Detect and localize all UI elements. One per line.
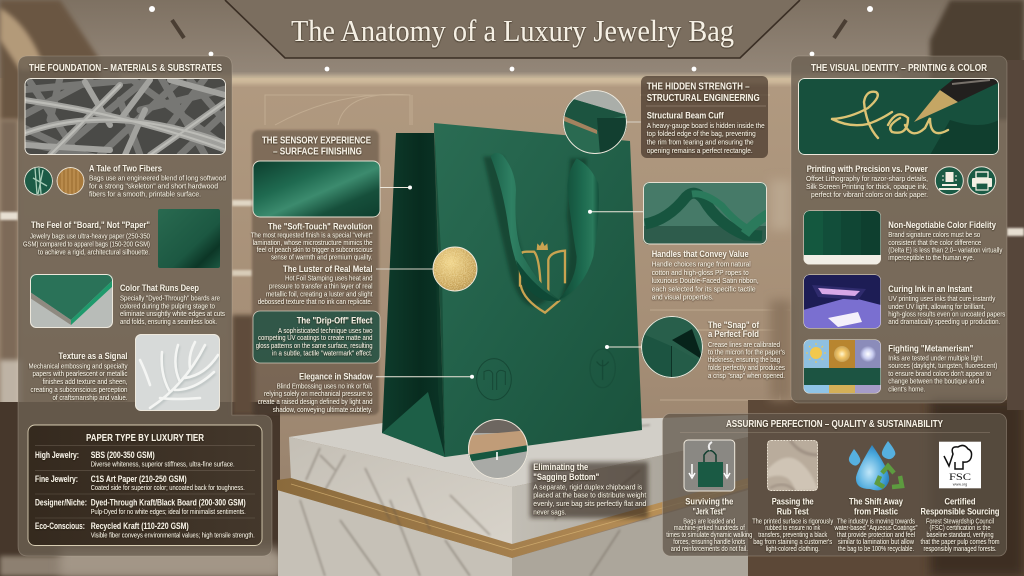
image: soft-touch satin surface <box>253 161 380 217</box>
assuring perfection heading: ASSURING PERFECTION – QUALITY & SUSTAINABILITY <box>726 419 943 430</box>
hidden strength background <box>641 76 768 158</box>
text: texture as a signal: creating a subconscious perception <box>30 385 128 394</box>
text: surviving the jerk test: "Jerk Test" <box>693 506 726 518</box>
text: passing the rub test: Passing the <box>772 496 814 508</box>
text: surviving the jerk test <box>666 496 752 553</box>
text: handles that convey value: luxurious Double-Faced Satin ribbon, <box>652 276 759 285</box>
text: soft-touch revolution: feel of peach skin to trigger a subconscious <box>257 245 373 254</box>
text: surviving the jerk test: forces, ensuring handle knots <box>673 537 746 546</box>
panel: the foundation <box>18 56 272 556</box>
text: eliminating the sagging bottom: A separate, rigid duplex chipboard is <box>533 482 643 492</box>
text: snap of a perfect fold: The "Snap" of <box>708 320 760 331</box>
arrow: cuff leader <box>627 121 641 123</box>
text: color fidelity: (Delta E) is less than 2.0– variation virtually <box>888 246 1003 254</box>
text: eliminating the sagging bottom: evenly, sure bag sits perfectly flat and <box>533 499 646 508</box>
ribbon shadow <box>483 157 587 306</box>
text: certified responsible sourcing: (FSC) certification is the <box>930 523 991 532</box>
panel: assuring perfection <box>662 414 1006 556</box>
drip-off text: A sophisticated technique uses two <box>278 326 372 335</box>
text: a tale of two fibers: fibers for a smooth, printable surface. <box>89 190 201 198</box>
table: paper type by luxury tier <box>28 425 262 546</box>
table rows: SBS (200-350 GSM) <box>91 450 155 461</box>
image: color swatches <box>803 210 881 265</box>
text: handles that convey value: Handles that Convey Value <box>652 249 749 260</box>
icon: gold foil circle <box>433 247 477 291</box>
text: structural beam cuff: top folded edge of the bag, preventing <box>647 129 756 138</box>
icon: FSC logo: FSC <box>949 472 971 482</box>
text: feel of board <box>23 220 150 256</box>
bag gusset <box>382 133 445 457</box>
image: satin ribbon <box>643 182 768 246</box>
image: green paper swatch <box>158 209 220 268</box>
text: shift away from plastic <box>834 496 918 553</box>
text: passing the rub test: The printed surface is rigorously <box>752 516 834 526</box>
sagging text shadow <box>530 462 648 518</box>
table rows: Dyed-Through Kraft/Black Board (200-300 GSM) <box>91 498 246 508</box>
text: fighting metamerism: to ensure brand colors don't appear to <box>888 369 991 378</box>
text: fighting metamerism: Inks are tested under multiple light <box>888 354 982 362</box>
text: structural beam cuff: A heavy-gauge board is hidden inside the <box>647 121 765 130</box>
text: curing ink: and dramatically speeding up production. <box>888 317 1000 326</box>
text: certified responsible sourcing: that the paper pulp comes from <box>920 537 1000 546</box>
icon: FSC logo <box>939 442 981 488</box>
image: dyed-through board <box>30 274 113 328</box>
text: luster of real metal: pressure to transfer a thin layer of real <box>269 282 373 290</box>
drip-off text: gloss patterns on the same surface, resulting <box>256 341 372 350</box>
text: printing with precision: perfect for vibrant colors on dark paper. <box>811 190 928 199</box>
table rows: High Jewelry: <box>35 450 79 461</box>
text: curing ink: UV printing uses inks that cure instantly <box>888 294 996 303</box>
arrow: snap leader <box>605 345 641 349</box>
text: curing ink <box>888 284 1006 326</box>
text: feel of board: GSM) compared to apparel bags (150-200 GSM) <box>23 240 150 248</box>
gold foil logo <box>520 241 565 313</box>
text: eliminating the sagging bottom: placed at the base to distribute weight <box>533 490 646 500</box>
text: color fidelity: consistent that the color difference <box>888 238 981 247</box>
icon: hardwood fiber <box>56 167 84 195</box>
text: soft-touch revolution <box>251 222 373 262</box>
text: shift away from plastic: water-based "Aqueous Coatings" <box>834 523 918 532</box>
icon: softwood fiber <box>24 166 53 196</box>
text: shift away from plastic: The industry is moving towards <box>837 516 915 526</box>
text: a tale of two fibers: A Tale of Two Fibers <box>89 164 162 174</box>
text: elegance in shadow: Blind Embossing uses no ink or foil, <box>277 382 372 390</box>
text: curing ink: high-gloss results even on uncoated papers <box>888 310 1006 318</box>
drip-off text: The "Drip-Off" Effect <box>297 316 373 326</box>
text: texture as a signal: finishes add texture and sheen, <box>42 377 128 386</box>
arrow: soft-touch leader <box>380 186 412 190</box>
text: passing the rub test: Rub Test <box>777 506 809 518</box>
table heading: PAPER TYPE BY LUXURY TIER <box>86 433 205 444</box>
text: printing with precision: Silk Screen Printing for thick, opaque ink, <box>806 182 928 191</box>
text: snap of a perfect fold: folds perfectly and produces <box>708 363 785 372</box>
text: fighting metamerism <box>888 344 997 394</box>
text: soft-touch revolution: The "Soft-Touch" Revolution <box>268 222 373 232</box>
text: eliminating the sagging bottom: Eliminating the <box>533 462 588 473</box>
text: surviving the jerk test: Surviving the <box>685 496 733 508</box>
text: surviving the jerk test: Bags are loaded and <box>683 516 735 526</box>
text: snap of a perfect fold <box>708 320 785 380</box>
sensory panel background <box>252 130 379 415</box>
text: color that runs deep: Color That Runs Deep <box>120 283 199 294</box>
text: a tale of two fibers <box>89 164 226 198</box>
text: eliminating the sagging bottom: never sags. <box>533 508 566 516</box>
text: texture as a signal <box>28 351 128 402</box>
text: color fidelity: imperceptible to the human eye. <box>888 253 974 262</box>
text: printing with precision: Printing with Precision vs. Power <box>807 164 928 175</box>
table rows: Eco-Conscious: <box>35 521 85 532</box>
green bag <box>382 123 642 457</box>
text: handles that convey value: cotton and high-gloss PP ropes to <box>652 268 749 277</box>
text: handles that convey value: Handle choices range from natural <box>652 260 751 268</box>
text: color fidelity <box>888 220 1003 262</box>
panel: the sensory experience <box>251 130 477 415</box>
text: feel of board: to achieve a rigid, architectural silhouette. <box>38 248 150 256</box>
table rows: Visible fiber conveys environmental values; high tensile strength. <box>91 530 255 540</box>
detail: cuff circle <box>563 90 627 154</box>
foundation panel background <box>18 56 272 556</box>
blind emboss emblem <box>477 349 615 400</box>
icon: jerk test bag <box>684 440 735 491</box>
callout: drip-off effect <box>253 311 380 363</box>
text: elegance in shadow: Elegance in Shadow <box>299 372 373 382</box>
text: luster of real metal: metallic foil, creating a luster and slight <box>266 290 372 298</box>
image: gold calligraphy pen <box>798 78 1000 155</box>
text: certified responsible sourcing <box>920 496 1000 553</box>
text: passing the rub test: transfers, preventing a black <box>758 530 828 539</box>
hidden strength heading <box>647 82 760 104</box>
text: texture as a signal: Texture as a Signal <box>58 351 128 362</box>
text: shift away from plastic: The Shift Away <box>849 496 904 508</box>
text: feel of board: The Feel of "Board," Not "Paper" <box>31 220 150 231</box>
text: snap of a perfect fold: thickness, ensuring the bag <box>708 355 780 364</box>
text: passing the rub test <box>752 496 834 553</box>
text: luster of real metal: The Luster of Real Metal <box>283 264 372 275</box>
pedestal upper right face <box>512 437 748 545</box>
text: color that runs deep: and folds, ensuring a seamless look. <box>120 317 217 326</box>
text: certified responsible sourcing: Certified <box>944 496 976 508</box>
gold trim <box>277 478 748 558</box>
text: luster of real metal: Hot Foil Stamping uses heat and <box>285 274 372 282</box>
text: a tale of two fibers: Bags use an engineered blend of long softwood <box>89 174 226 182</box>
arrow: foil leader <box>376 268 433 270</box>
icon: rub test fabric <box>767 440 818 491</box>
text: snap of a perfect fold: a Perfect Fold <box>708 329 759 340</box>
bag front panel <box>434 123 642 457</box>
text: soft-touch revolution: sense of warmth and premium quality. <box>271 253 372 262</box>
text: curing ink: under UV light, allowing for brilliant, <box>888 302 985 311</box>
text: curing ink: Curing Ink in an Instant <box>888 284 973 295</box>
panel: the hidden strength <box>467 76 785 518</box>
text: fighting metamerism: sources (daylight, tungsten, fluorescent) <box>888 361 997 370</box>
sensory heading: – SURFACE FINISHING <box>273 146 362 158</box>
visual identity heading: THE VISUAL IDENTITY – PRINTING & COLOR <box>811 63 988 74</box>
text: elegance in shadow: relying solely on mechanical pressure to <box>264 389 373 398</box>
text: snap of a perfect fold: to the micron for the paper's <box>708 348 785 356</box>
image: embossed texture <box>135 334 220 411</box>
pedestal lower block <box>278 490 512 576</box>
table rows: Pulp-Dyed for no white edges; ideal for minimalist sentiments. <box>91 507 246 516</box>
assuring perfection background <box>662 414 1006 556</box>
icon: offset press <box>935 167 963 195</box>
table background <box>28 425 262 546</box>
table rows: Diverse whiteness, superior stiffness, ultra-fine surface. <box>91 460 235 468</box>
text: surviving the jerk test: times to simulate dynamic walking <box>666 530 752 539</box>
text: passing the rub test: rubbed to ensure no ink <box>765 523 820 532</box>
text: structural beam cuff: Structural Beam Cuff <box>647 110 724 122</box>
text: shift away from plastic: the bag to be 100% recyclable. <box>838 544 914 553</box>
foundation heading: THE FOUNDATION – MATERIALS & SUBSTRATES <box>29 63 222 74</box>
text: luster of real metal <box>258 264 373 306</box>
marble pedestal <box>277 415 748 576</box>
text: soft-touch revolution: The most requested finish is a special "velvet" <box>251 230 373 240</box>
icon: FSC logo: www.org <box>953 482 967 486</box>
drip-off text: in a subtle, tactile "watermark" effect. <box>272 348 373 358</box>
text: color that runs deep <box>120 283 225 326</box>
text: texture as a signal: papers with pearlescent or metallic <box>32 369 128 378</box>
text: printing with precision <box>806 164 928 199</box>
hidden strength heading: STRUCTURAL ENGINEERING <box>647 93 760 104</box>
drip-off text: competing UV coatings to create matte and <box>258 333 372 342</box>
table rows: C1S Art Paper (210-250 GSM) <box>91 474 187 485</box>
text: color fidelity: Non-Negotiable Color Fidelity <box>888 220 997 231</box>
text: handles that convey value <box>652 249 759 302</box>
icon: printer <box>968 167 996 195</box>
text: elegance in shadow: create a raised design defined by light and <box>258 397 372 406</box>
drip-off text <box>256 316 373 358</box>
table rows <box>35 450 255 540</box>
pedestal upper left face <box>289 437 512 545</box>
text: color fidelity: Brand signature colors must be so <box>888 230 980 239</box>
text: eliminating the sagging bottom: "Sagging Bottom" <box>533 472 599 483</box>
table rows: Coated side for superior color; uncoated back for toughness. <box>91 483 245 492</box>
text: fighting metamerism: client's home. <box>888 384 925 394</box>
wall panelling <box>265 94 790 400</box>
text: structural beam cuff <box>647 110 765 155</box>
text: feel of board: Jewelry bags use ultra-heavy paper (250-350 <box>30 232 150 240</box>
text: passing the rub test: bag from staining a customer's <box>753 537 833 546</box>
sensory heading: THE SENSORY EXPERIENCE <box>262 136 371 146</box>
drip-off box <box>253 311 380 363</box>
text: color that runs deep: eliminate unsightly white edges at cuts <box>120 309 225 318</box>
text: elegance in shadow: shadow, conveying ultimate subtlety. <box>273 405 372 414</box>
gusset lower fold <box>382 392 445 457</box>
text: shift away from plastic: from Plastic <box>854 506 899 518</box>
text: eliminating the sagging bottom <box>533 462 646 516</box>
text: a tale of two fibers: for a strong "skeleton" and short hardwood <box>89 182 218 190</box>
text: fighting metamerism: change between the boutique and a <box>888 376 984 386</box>
satin ribbon handles <box>491 153 599 301</box>
text: snap of a perfect fold: a crisp "snap" when opened. <box>708 371 785 380</box>
text: certified responsible sourcing: responsibly managed forests. <box>924 544 996 553</box>
text: fighting metamerism: Fighting "Metamerism" <box>888 344 973 354</box>
pedestal top surface <box>289 415 748 487</box>
text: snap of a perfect fold: Crease lines are calibrated <box>708 340 780 349</box>
text: elegance in shadow <box>258 372 373 414</box>
text: soft-touch revolution: lamination, whose microstructure mimics the <box>253 238 372 247</box>
table rows: Designer/Niche: <box>35 498 87 508</box>
table rows: Fine Jewelry: <box>35 474 78 485</box>
text: passing the rub test: light-colored clothing. <box>766 544 820 553</box>
lower left room <box>0 402 280 576</box>
text: color that runs deep: colored during the pulping stage to <box>120 302 215 310</box>
text: structural beam cuff: the rim from tearing and ensuring the <box>647 138 754 146</box>
text: handles that convey value: each selected for its specific tactile <box>652 284 756 294</box>
lower right wood <box>748 400 1024 576</box>
table rows: Recycled Kraft (110-220 GSM) <box>91 521 189 532</box>
text: surviving the jerk test: machine-jerked hundreds of <box>674 523 745 532</box>
text: texture as a signal: Mechanical embossing and specialty <box>28 362 128 370</box>
text: structural beam cuff: opening remains a perfect rectangle. <box>647 146 753 155</box>
arrow: handle leader <box>588 210 643 214</box>
text: certified responsible sourcing: Forest Stewardship Council <box>926 516 994 526</box>
detail: snap fold circle <box>641 316 703 378</box>
text: printing with precision: Offset Lithography for razor-sharp details, <box>806 174 928 183</box>
text: certified responsible sourcing: baseline standard, verifying <box>926 530 994 539</box>
icon: water drops and recycling <box>849 441 902 490</box>
image: paper fibers micrograph <box>20 76 230 158</box>
image: metamerism light test <box>803 339 881 394</box>
title: The Anatomy of a Luxury Jewelry Bag <box>291 13 734 48</box>
image: UV curing lamp <box>803 274 881 329</box>
hidden strength heading: THE HIDDEN STRENGTH – <box>647 82 750 92</box>
panel: the visual identity <box>791 56 1007 403</box>
text: luster of real metal: debossed texture that no ink can replicate. <box>258 297 372 306</box>
detail: sagging bottom circle <box>467 419 529 481</box>
text: shift away from plastic: that provide protection and feel <box>837 530 915 539</box>
arrow: emboss leader <box>376 375 474 379</box>
visual identity background <box>791 56 1007 403</box>
text: handles that convey value: and visual properties. <box>652 292 714 302</box>
text: texture as a signal: of craftsmanship and value. <box>52 393 128 402</box>
text: certified responsible sourcing: Responsible Sourcing <box>920 506 1000 518</box>
text: color that runs deep: Specially "Dyed-Through" boards are <box>120 294 220 302</box>
ceiling <box>0 0 1024 78</box>
text: shift away from plastic: similar to lamination but allow <box>838 537 915 546</box>
text: surviving the jerk test: and reinforcements do not fail. <box>671 544 748 553</box>
sensory heading <box>262 136 371 158</box>
